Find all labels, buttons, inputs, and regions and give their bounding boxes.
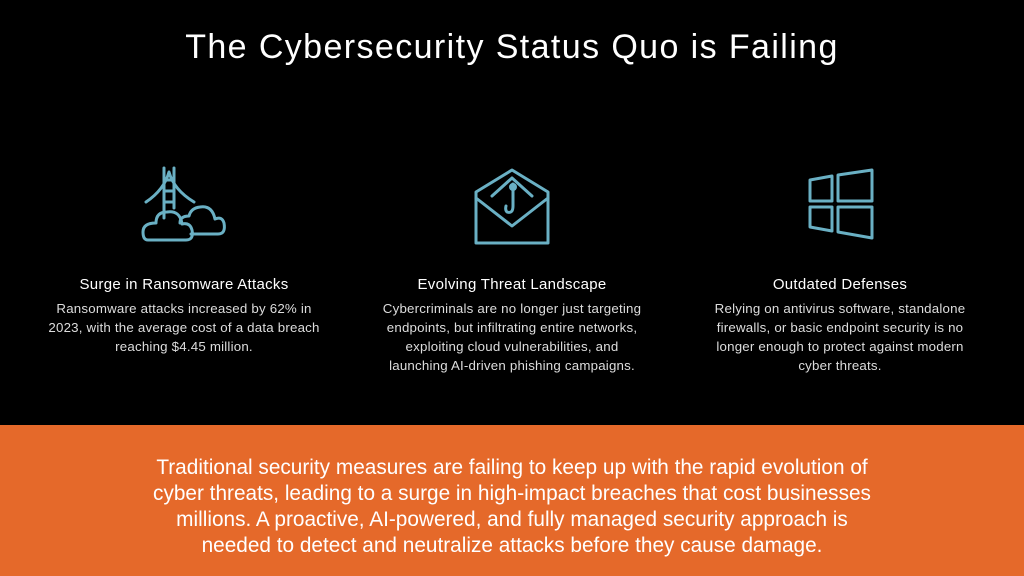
icon: windows (808, 168, 874, 240)
panel: threat landscape (383, 168, 641, 373)
body text: Ransomware attacks increased by 62% in 2023, with the average cost of a data breach reaching $4.45 million. (48, 301, 320, 354)
icon: phishing envelope (474, 168, 550, 244)
title: The Cybersecurity Status Quo is Failing (185, 28, 839, 66)
icon: bridge clouds (142, 166, 226, 242)
callout: orange band (0, 425, 1024, 576)
panel: ransomware (48, 166, 320, 354)
body text: Cybercriminals are no longer just targeting endpoints, but infiltrating entire networks, exploiting cloud vulnerabilities, and launching AI‑driven phishing campaigns. (383, 301, 641, 373)
callout: orange band: Traditional security measures are failing to keep up with the rapid evolution of cyber threats, leading to a surge in high-impact breaches that cost businesses millions. A proactive, AI-powered, and fully managed security approach is needed to detect and neutralize attacks before they cause damage. (153, 456, 871, 557)
body text: Relying on antivirus software, standalone firewalls, or basic endpoint security is no longer enough to protect against modern cyber threats. (715, 301, 965, 373)
panel: outdated defenses (715, 168, 965, 373)
heading: Surge in Ransomware Attacks (79, 276, 289, 293)
heading: Outdated Defenses (773, 276, 907, 293)
heading: Evolving Threat Landscape (417, 276, 606, 293)
